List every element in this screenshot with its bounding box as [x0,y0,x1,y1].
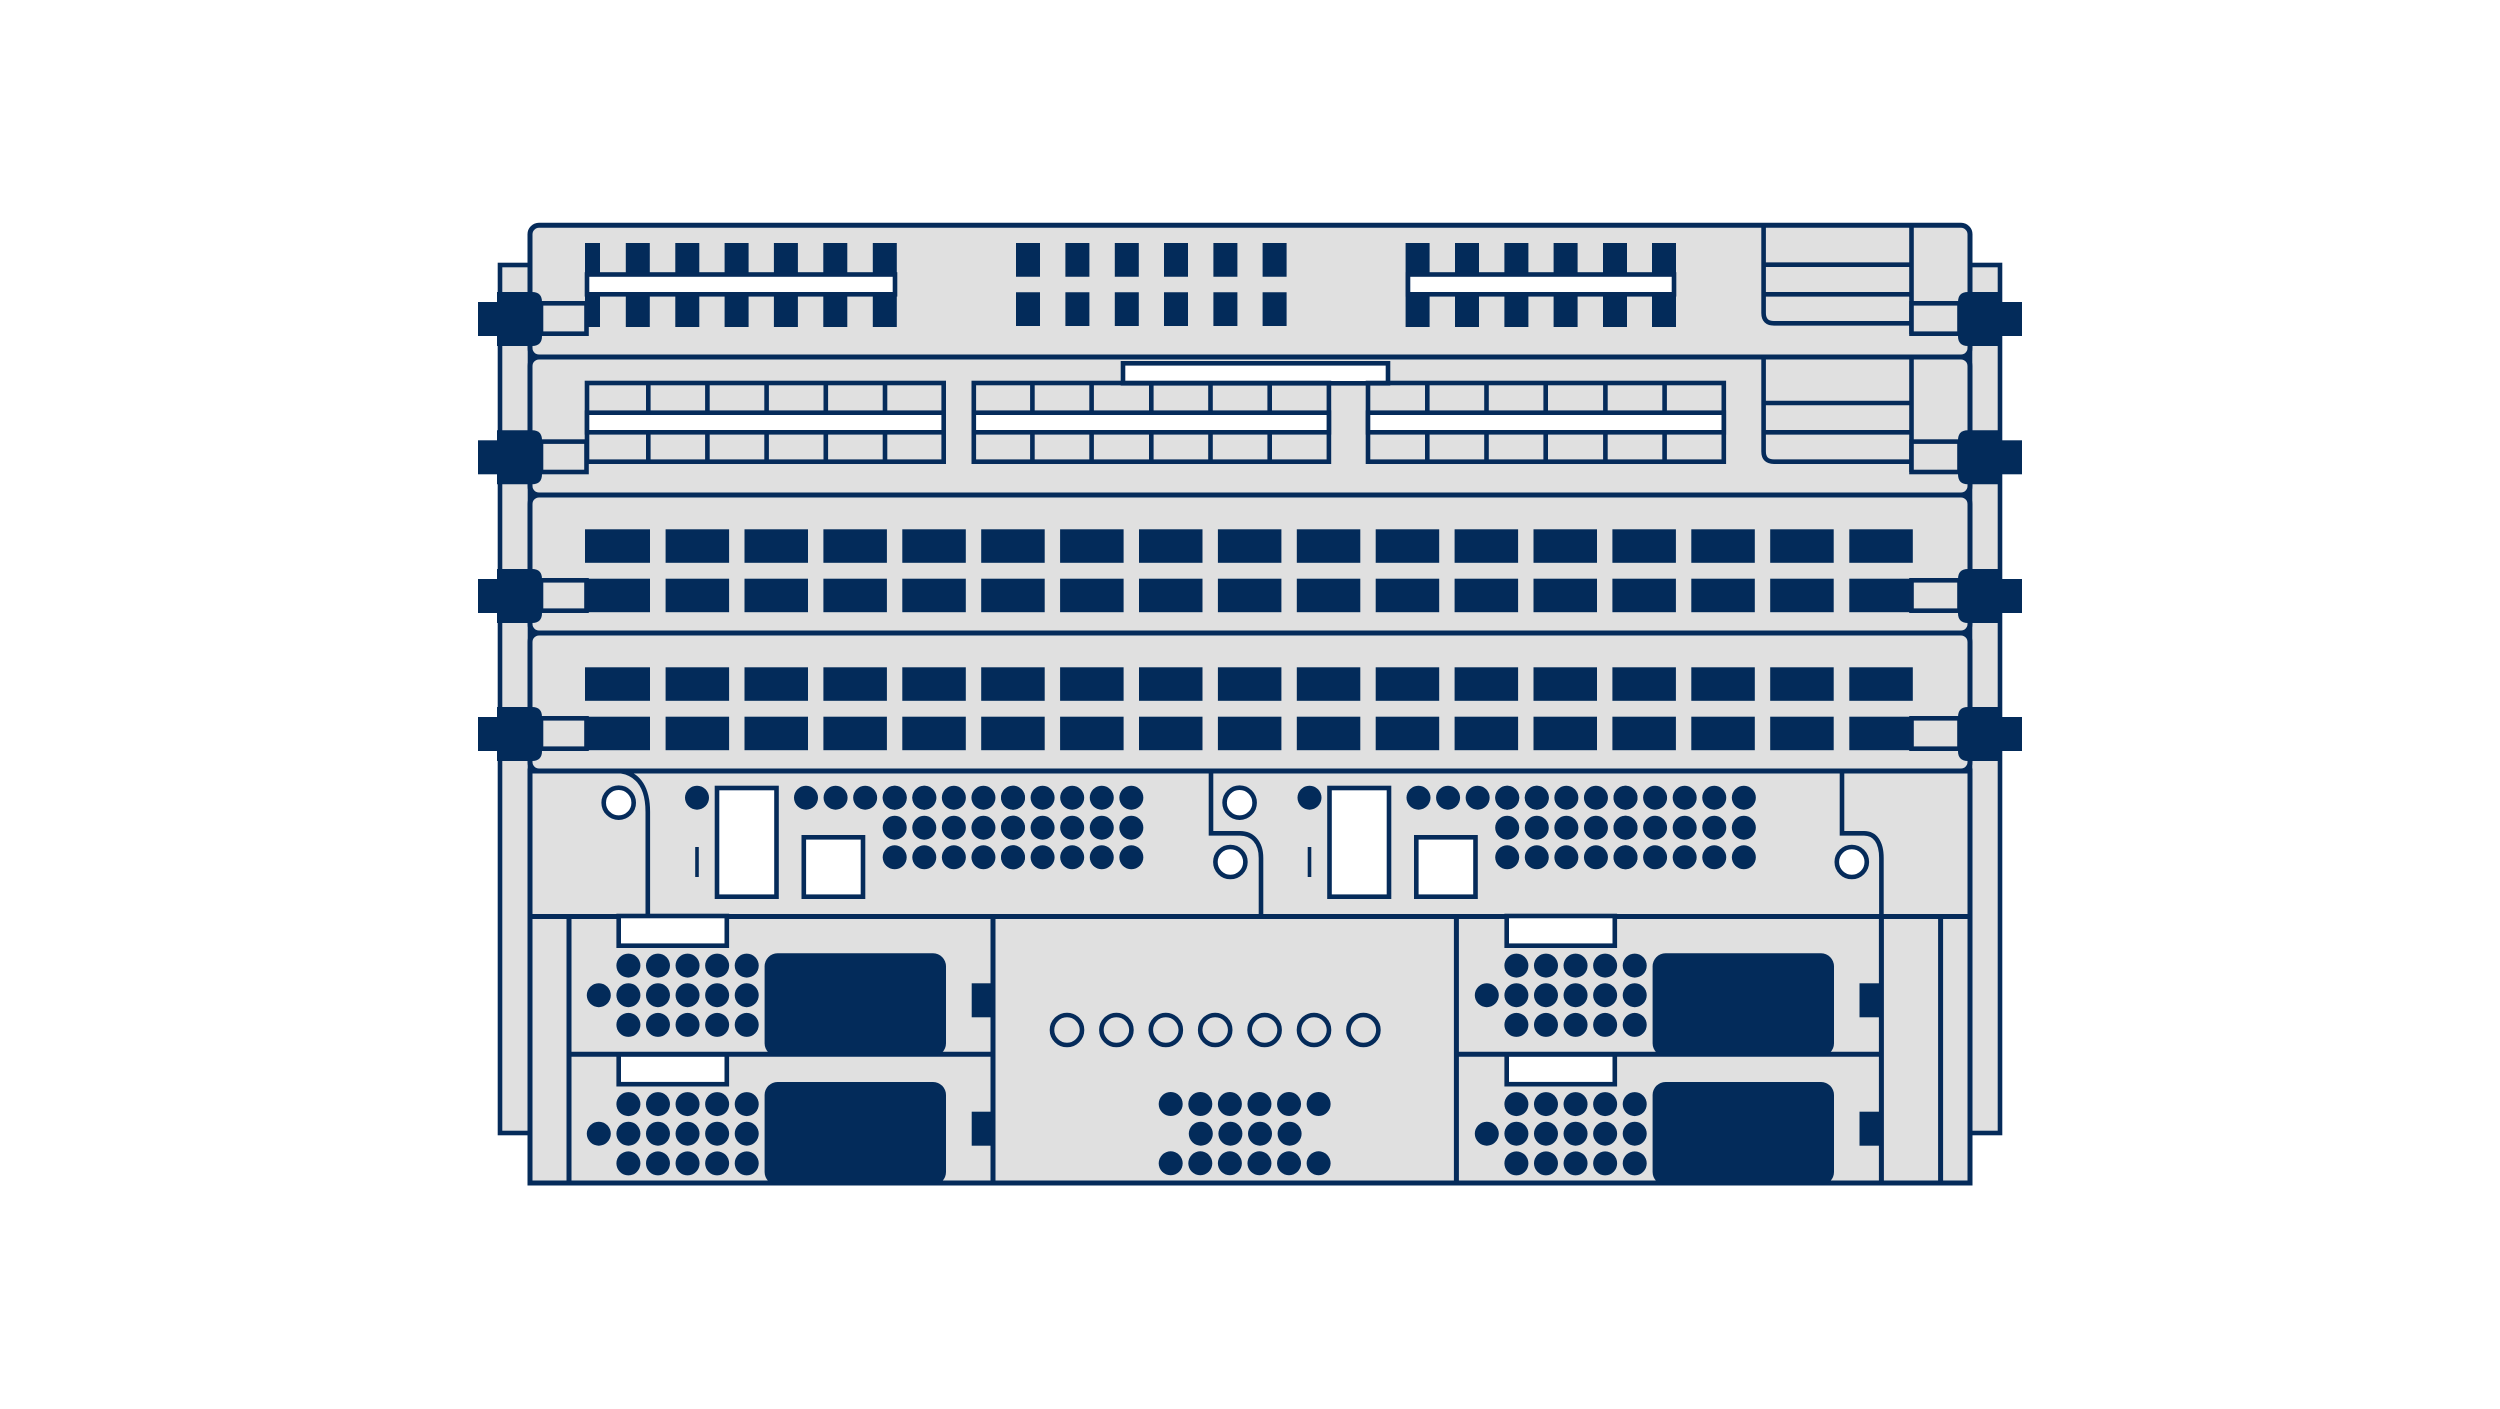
power supply left top [587,916,993,1056]
top label [1123,363,1388,383]
power supply left bottom [587,1054,993,1185]
left rack rail [500,265,530,1133]
controller module outlines [620,771,1881,916]
lower chassis body [530,771,1970,1183]
center slot group [1016,243,1287,326]
right vent section [1764,357,1912,472]
screw holes [604,788,1867,877]
right vent section [1764,225,1912,334]
mounting handles left [478,292,586,761]
left slot group [585,243,897,327]
rack unit 3: square ports [530,495,1970,633]
rack unit 1: slotted panel [530,225,1970,357]
controller module left [685,786,1143,897]
center vent dots [1159,1092,1331,1175]
port rows [585,667,1913,750]
right slot group [1406,243,1676,327]
port grid left [587,383,944,462]
power supply right bottom [1475,1054,1881,1185]
port grid center [974,383,1329,462]
port grid right [1368,383,1724,462]
port rows [585,529,1913,612]
rack unit 4: square ports [530,633,1970,771]
right rack rail [1970,265,2000,1133]
center status rings [1052,1015,1378,1045]
power supply right top [1475,916,1881,1056]
controller module right [1298,786,1756,897]
rack unit 2: port grids [530,357,1970,495]
mounting handles right [1912,292,2022,761]
